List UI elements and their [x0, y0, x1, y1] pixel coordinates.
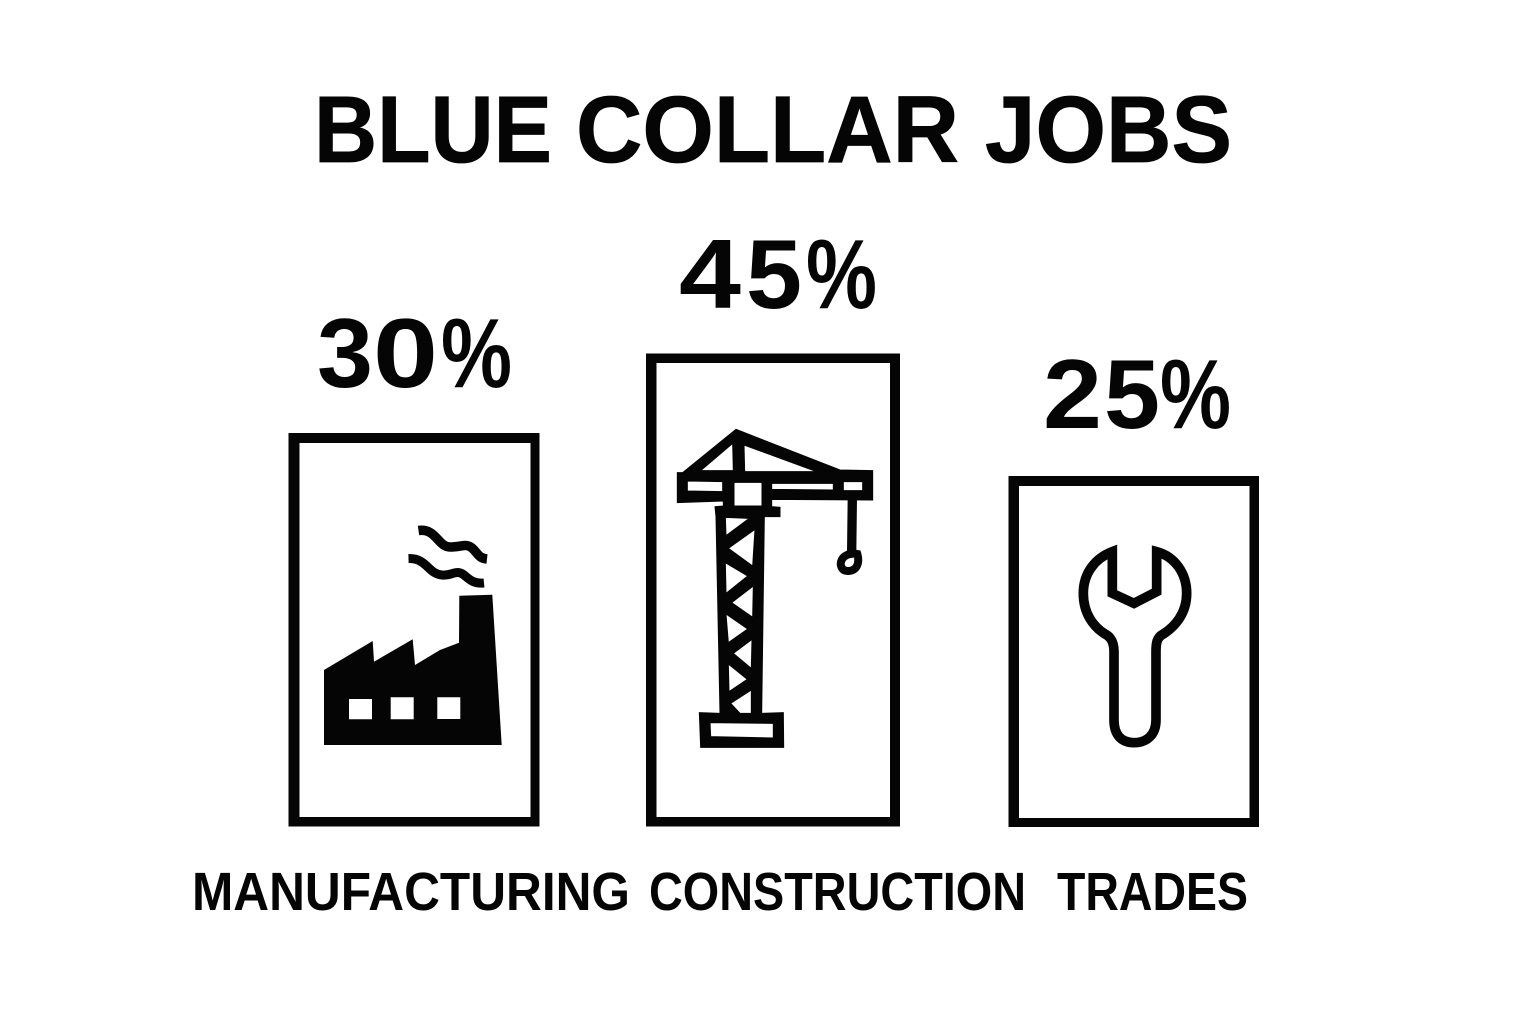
panel: manufacturing [288, 298, 540, 826]
percentage: construction 45% [679, 219, 877, 329]
label: trades: TRADES [1057, 862, 1248, 922]
percentage: trades 25%: 5 [1104, 339, 1160, 449]
percentage: manufacturing 30%: 0 [373, 298, 438, 408]
icon: factory with smoke [324, 530, 502, 745]
bar frame: manufacturing [288, 433, 540, 826]
bar frame: construction [646, 354, 900, 826]
icon: tower crane [677, 429, 873, 747]
title: BLUE [314, 77, 552, 183]
panel: construction [646, 219, 900, 826]
bar frame: trades [1008, 476, 1259, 827]
title: JOBS [985, 77, 1232, 183]
panel: trades [1008, 339, 1259, 827]
percentage: manufacturing 30%: % [441, 298, 512, 408]
percentage: construction 45%: 4 [679, 219, 741, 329]
percentage: manufacturing 30% [317, 298, 512, 408]
title [314, 77, 1232, 183]
percentage: manufacturing 30%: 3 [317, 298, 373, 408]
label: construction: CONSTRUCTION [649, 862, 1026, 922]
icon: wrench [1083, 552, 1187, 743]
title: COLLAR [576, 77, 959, 183]
percentage: construction 45%: % [806, 219, 877, 329]
percentage: trades 25%: 2 [1043, 339, 1102, 449]
percentage: trades 25% [1043, 339, 1231, 449]
label: manufacturing: MANUFACTURING [192, 862, 630, 922]
percentage: trades 25%: % [1160, 339, 1231, 449]
percentage: construction 45%: 5 [746, 219, 802, 329]
